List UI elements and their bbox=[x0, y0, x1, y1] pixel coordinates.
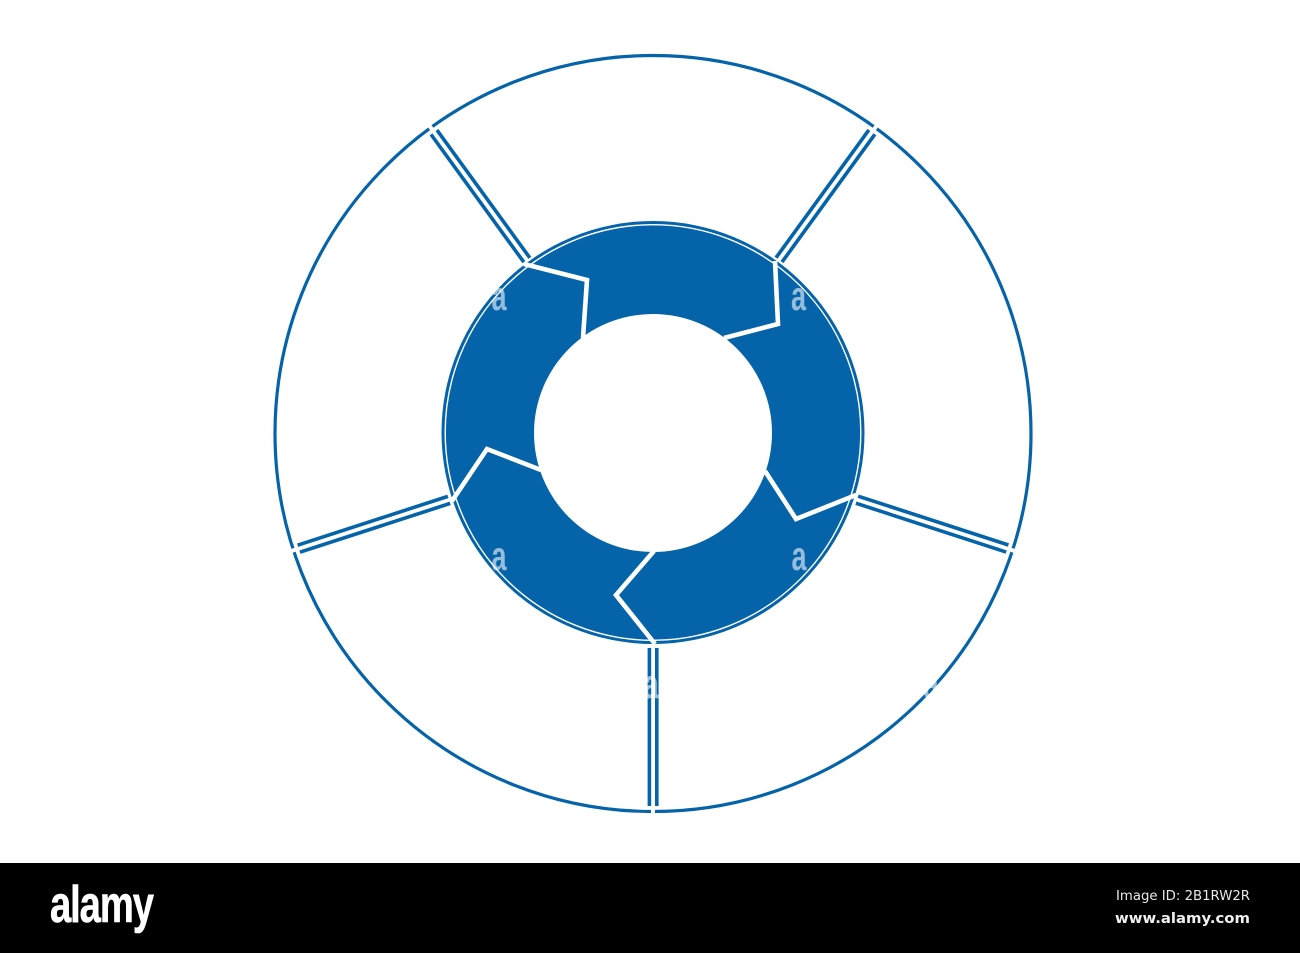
ring inner white outline bbox=[445, 225, 861, 640]
divider: upper right bbox=[767, 121, 882, 273]
image id: Image ID: 2B1RW2R bbox=[1116, 889, 1250, 904]
arrow joint: upper left bbox=[524, 264, 587, 338]
arrow joint: lower left bbox=[452, 449, 541, 501]
divider: upper left bbox=[424, 121, 538, 273]
watermark: lower left: a bbox=[491, 535, 507, 579]
arrow joint: upper right bbox=[724, 261, 778, 338]
divider: lower right bbox=[844, 491, 1019, 557]
footer band bbox=[0, 863, 1300, 953]
centre hole bbox=[534, 314, 772, 552]
watermark: upper right: a bbox=[791, 275, 807, 319]
arrow joint: lower right bbox=[765, 471, 856, 519]
watermark: upper left: a bbox=[491, 275, 507, 319]
radial dividers bbox=[288, 121, 1019, 816]
outer ring bbox=[275, 56, 1031, 812]
divider: bottom bbox=[648, 636, 659, 816]
blue arrow ring bbox=[442, 221, 864, 644]
watermark: on outer ring: a bbox=[923, 663, 939, 707]
logo: alamy: alamy bbox=[50, 875, 154, 933]
arrow joint: bottom bbox=[616, 551, 655, 644]
watermark: lower right: a bbox=[791, 535, 807, 579]
watermark: on bottom divider: a bbox=[643, 663, 659, 707]
website: www.alamy.com bbox=[1115, 911, 1250, 927]
ring fill bbox=[442, 221, 864, 644]
watermark glyphs bbox=[491, 275, 939, 707]
divider: lower left bbox=[288, 491, 462, 557]
